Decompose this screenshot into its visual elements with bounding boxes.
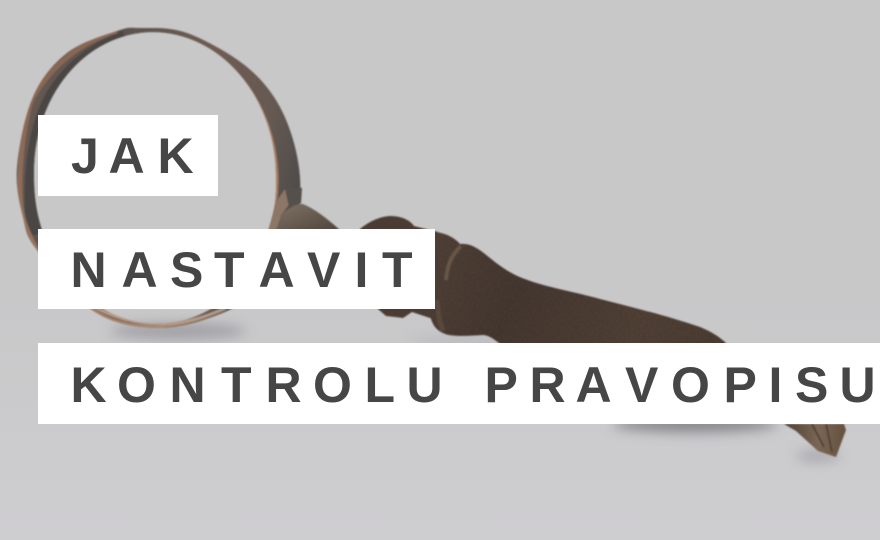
label background bbox=[38, 115, 218, 196]
title line: JAK bbox=[38, 115, 218, 196]
label text: KONTROLU PRAVOPISU bbox=[70, 357, 876, 413]
main grip bbox=[430, 232, 728, 352]
title line: NASTAVIT bbox=[38, 229, 435, 309]
handle neck bbox=[276, 204, 341, 231]
title line: KONTROLU PRAVOPISU bbox=[38, 343, 880, 424]
label text: NASTAVIT bbox=[70, 242, 413, 298]
upper collar bbox=[358, 216, 440, 320]
infographic canvas bbox=[16, 26, 880, 465]
label text: JAK bbox=[71, 128, 194, 184]
ferrule strip bbox=[268, 189, 289, 231]
magnifying glass bbox=[10, 20, 846, 457]
icon: magnifier ring bbox=[10, 20, 310, 335]
icon: magnifier handle bbox=[268, 187, 846, 457]
label background bbox=[38, 229, 435, 309]
soft shadows under the magnifying glass bbox=[110, 323, 840, 462]
handle foot bbox=[784, 424, 846, 457]
grip highlight bbox=[446, 246, 461, 280]
ferrule clasp bbox=[285, 187, 302, 207]
label background bbox=[38, 343, 880, 424]
